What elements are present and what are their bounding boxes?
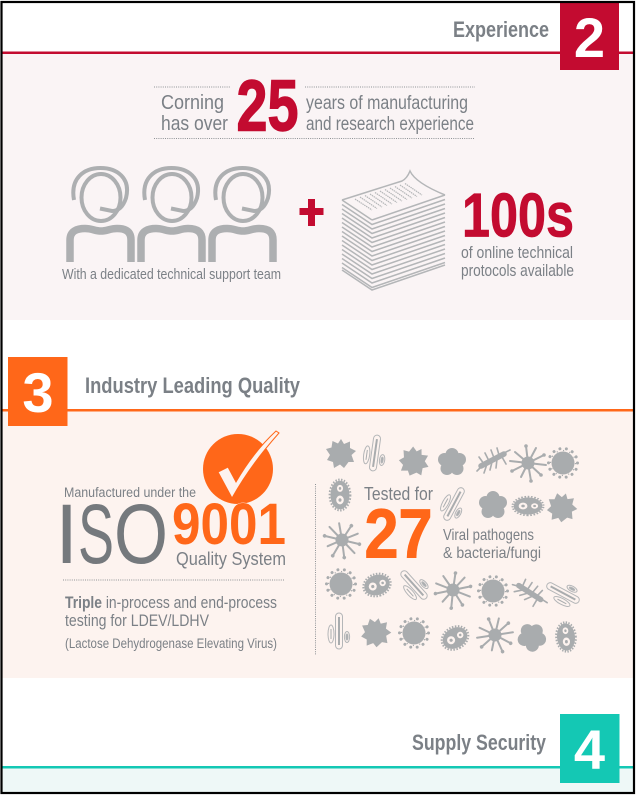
text: Viral pathogens and bacteria/fungi: & bacteria/fungi [443,545,541,562]
text: Quality System: Quality System [176,549,286,569]
icon: paper stack [342,171,445,290]
ISO 9001 block [55,431,286,581]
text: of online technical protocols available: protocols available [461,262,574,280]
statement: 25 years of experience [154,66,475,146]
badge: number 2: 2 [574,6,605,69]
text: years of manufacturing and research experience [306,93,474,135]
caption: support team: With a dedicated technical support team [62,267,281,283]
badge: number 2 [560,2,619,70]
icon: person with headset 1 [70,168,131,262]
icon: person with headset 2 [141,168,202,262]
text: ISO: I [55,487,78,581]
number: 25: 25 [236,66,298,146]
heading: Supply Security: Supply Security [412,730,547,755]
text: Corning has over [161,92,228,135]
text: ISO: O [114,487,168,581]
heading: Experience: Experience [453,17,549,42]
text: Corning has over: has over [161,113,228,135]
section 4 panel background [2,768,634,793]
icon: orange circle with check mark [203,431,279,504]
icon: support team [70,168,273,262]
text: Tested for: Tested for [364,484,433,504]
icons: pathogens [315,434,584,659]
text: triple in-process testing: testing for LDEV/LDHV [65,612,209,630]
text: triple in-process testing [65,594,277,651]
number: 9001: 9001 [172,492,286,557]
text: Viral pathogens and bacteria/fungi [443,527,541,562]
stat: 100s: 100s [462,182,574,250]
heading: Industry Leading Quality: Industry Leading Quality [85,373,301,398]
section 3 panel background [2,411,634,678]
badge: number 4: 4 [574,718,605,781]
text: of online technical protocols available [461,244,574,280]
text: Viral pathogens and bacteria/fungi: Viral pathogens [443,527,534,544]
text: ISO: S [78,487,114,581]
text: years of manufacturing and research experience: years of manufacturing [306,93,468,114]
text: ISO [55,487,168,581]
text: years of manufacturing and research experience: and research experience [306,114,474,135]
section 2 panel background [2,54,634,320]
section 3 header [2,357,634,426]
icon: person with headset 3 [212,168,273,262]
text: triple in-process testing: (Lactose Dehydrogenase Elevating Virus) [65,636,277,651]
text: triple in-process testing: Triple in-process and end-process [65,594,277,612]
badge: number 3: 3 [22,361,54,424]
section 2 header [2,2,634,70]
icon: plus [300,199,324,226]
text: of online technical protocols available: of online technical [461,244,573,262]
number: 27: 27 [364,494,432,572]
text: Manufactured under the: Manufactured under the [64,485,196,500]
section 4 header [2,714,634,783]
badge: number 4 [560,714,620,783]
text: Corning has over: Corning [161,92,224,114]
badge: number 3 [8,357,68,426]
